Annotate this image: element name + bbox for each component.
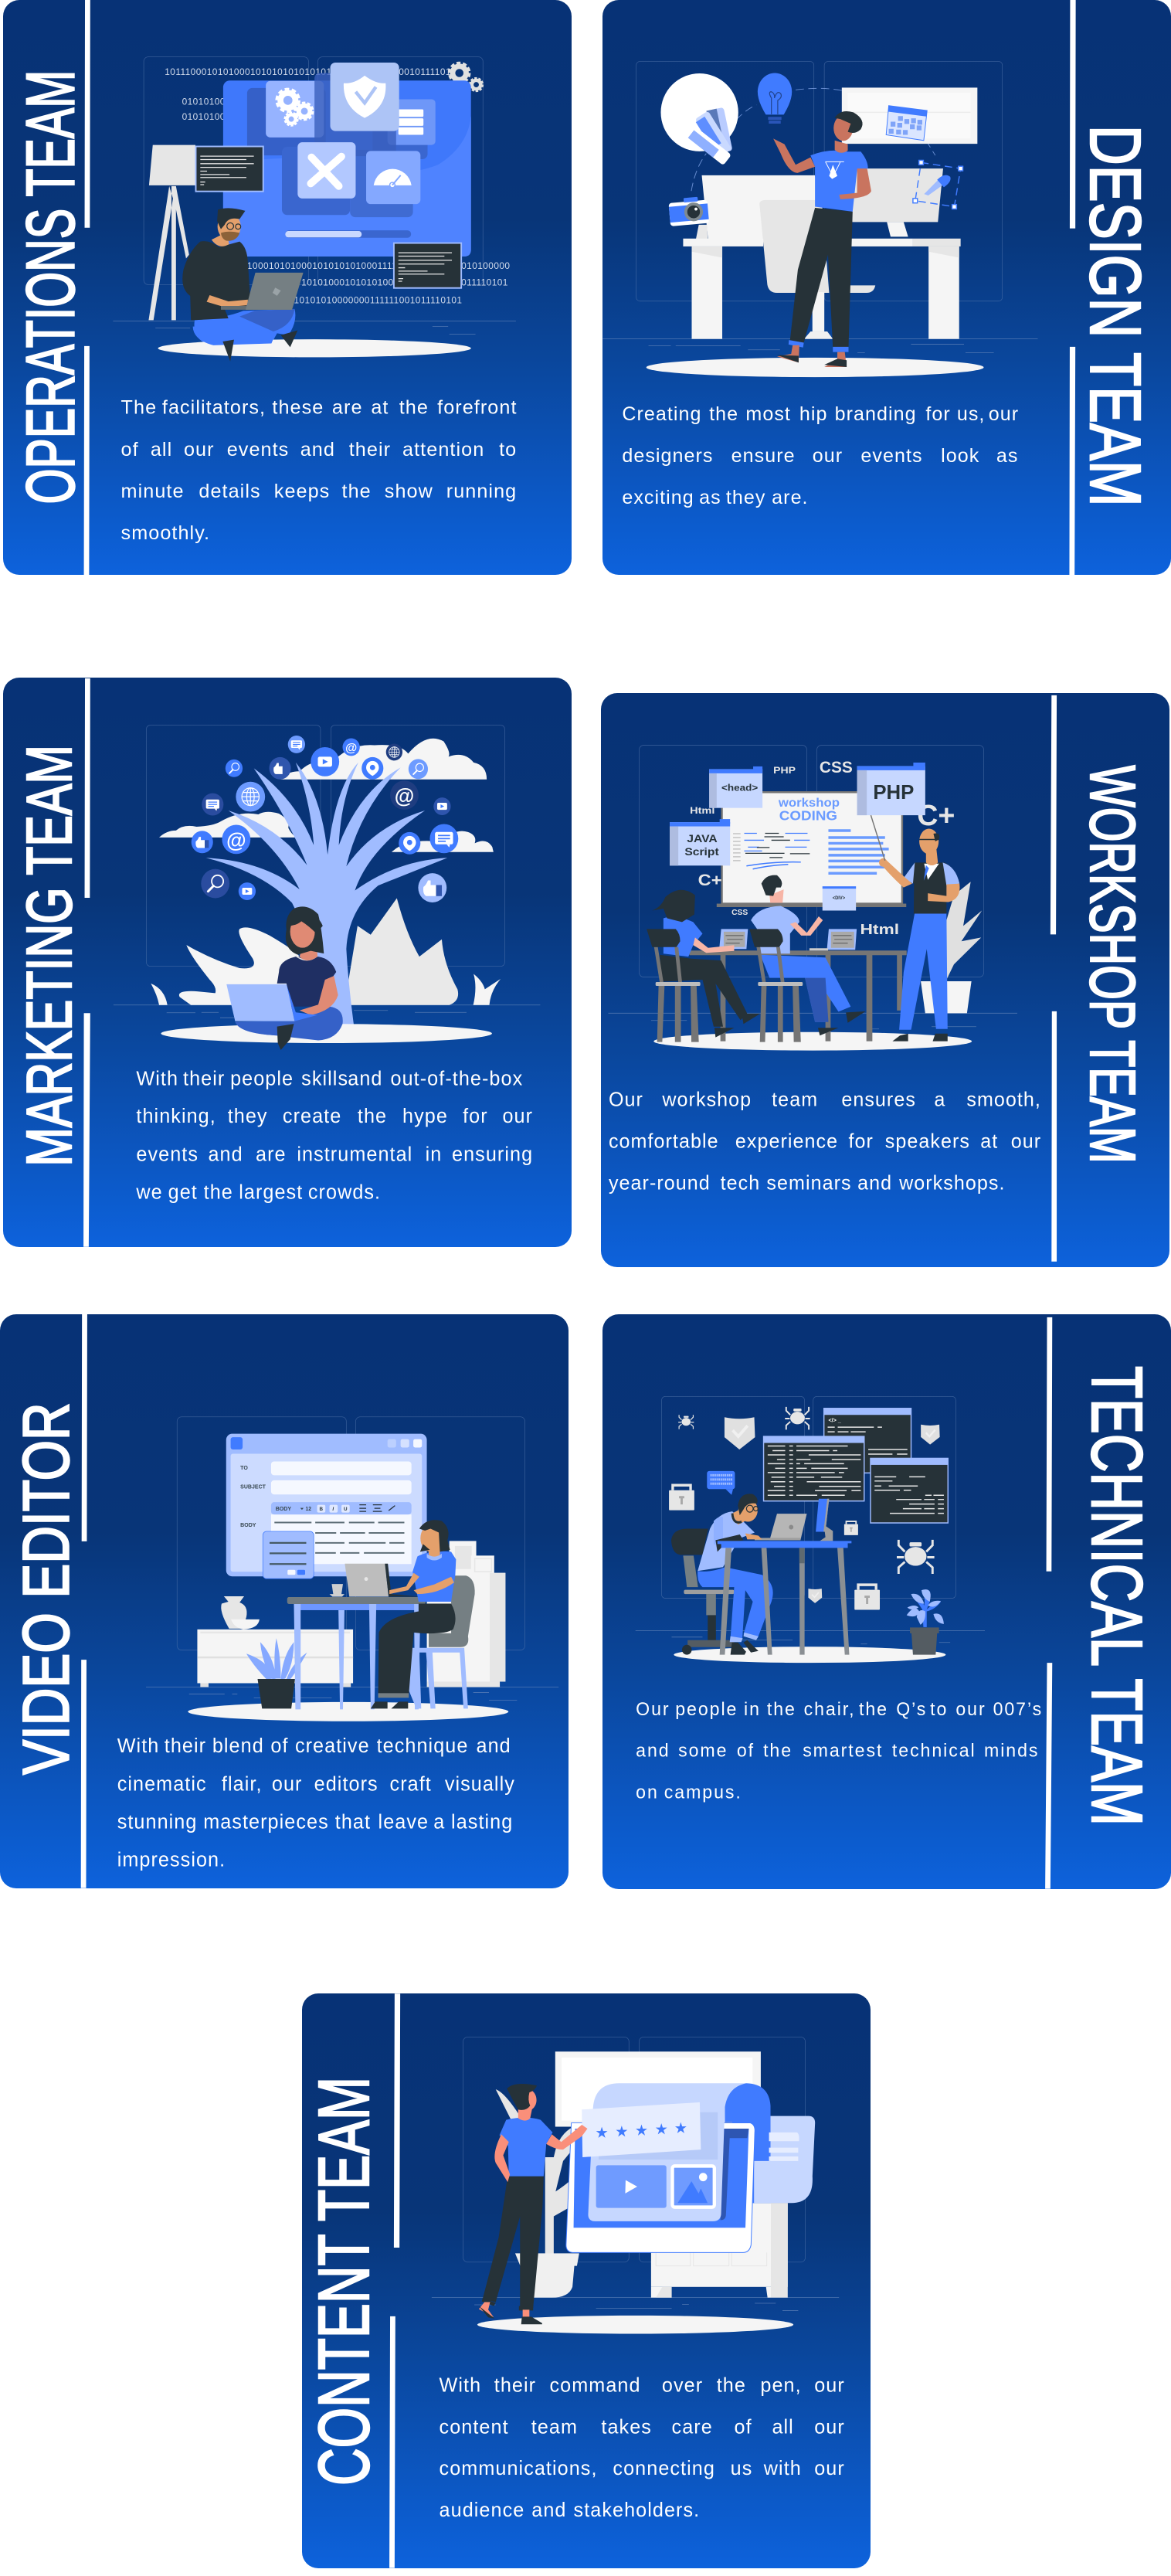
description: leave <box>378 1811 429 1833</box>
toolbar: BODY <box>276 1506 291 1512</box>
monitor and laptop <box>816 1499 829 1531</box>
chair <box>429 1575 475 1647</box>
binary text: 0010111101 <box>399 66 451 77</box>
description: Q’s <box>896 1698 927 1719</box>
window: div <box>823 886 856 910</box>
icon: camera <box>668 196 709 226</box>
binary text: 01010100 <box>182 111 226 122</box>
description: year-round <box>609 1172 711 1195</box>
description: the <box>342 481 372 502</box>
description: Creating <box>622 403 702 425</box>
description: stunning <box>117 1811 197 1833</box>
panel background <box>302 1993 871 2568</box>
description: their <box>165 1735 206 1757</box>
potted plant <box>496 2089 578 2255</box>
illustration: content creator <box>432 2037 839 2334</box>
panel: operations team <box>3 0 572 575</box>
window: div: <DIV> <box>833 896 846 901</box>
wall board <box>842 87 977 144</box>
dialog <box>263 1531 314 1579</box>
clouds <box>281 739 487 780</box>
panel background <box>3 678 572 1247</box>
description: show <box>385 481 433 502</box>
description: blend <box>212 1735 264 1757</box>
wall board <box>555 2051 761 2127</box>
panel: design team <box>602 0 1171 575</box>
description: largest <box>239 1181 303 1204</box>
description: The <box>121 397 157 419</box>
description: of <box>121 439 139 460</box>
description: team <box>531 2416 578 2438</box>
illustration: content creator: ★ <box>675 2121 687 2136</box>
description: us <box>731 2458 752 2479</box>
desk <box>718 1541 851 1548</box>
code label texts: CSS <box>731 909 748 917</box>
description: and <box>636 1740 670 1761</box>
code label texts: PHP <box>773 766 796 776</box>
description: and <box>531 2500 567 2521</box>
description: we <box>135 1181 163 1204</box>
title divider lines <box>81 1314 87 1888</box>
toolbar: 12 <box>306 1507 311 1512</box>
window: javascript: JAVA <box>687 833 718 845</box>
illustration: editor at desk: TO <box>240 1465 248 1471</box>
description: are. <box>772 487 809 508</box>
description: over <box>662 2374 703 2397</box>
description: are <box>332 397 363 419</box>
description: and <box>348 1068 383 1089</box>
code label texts: C+ <box>698 872 722 889</box>
description: and <box>208 1144 243 1165</box>
description: thinking, <box>136 1106 216 1127</box>
illustration: coding workshop <box>608 746 1017 1051</box>
description: smooth, <box>966 1089 1041 1111</box>
background shelves <box>450 1541 477 1575</box>
description: a <box>433 1811 445 1833</box>
description: Our <box>609 1089 643 1111</box>
panel background <box>602 0 1171 575</box>
description: the <box>709 403 738 425</box>
tree <box>206 763 447 1034</box>
description: our <box>955 1698 986 1719</box>
code windows <box>824 1409 911 1473</box>
description: events <box>860 445 923 467</box>
tables and laptops <box>690 950 907 1042</box>
code windows <box>195 147 263 192</box>
description: With <box>117 1735 159 1757</box>
toolbar <box>276 1505 395 1513</box>
description: for <box>849 1130 874 1153</box>
illustration: coding workshop: CODING <box>779 807 837 824</box>
description: events <box>227 439 289 460</box>
description: their <box>183 1068 225 1089</box>
description: audience <box>440 2500 524 2521</box>
description: at <box>371 397 389 419</box>
illustration: editor at desk: SUBJECT <box>240 1484 266 1490</box>
screen back roll <box>725 2083 771 2203</box>
description: details <box>199 481 261 502</box>
description: editors <box>314 1773 378 1795</box>
description: designers <box>622 445 714 467</box>
whiteboard <box>722 792 902 904</box>
code label texts: C+ <box>917 799 955 831</box>
description: to <box>930 1698 948 1719</box>
illustration: designer at desk <box>602 61 1037 377</box>
description: these <box>272 397 324 419</box>
woman with laptop <box>235 1007 343 1041</box>
title divider lines <box>83 678 90 1247</box>
description: flair, <box>222 1773 263 1795</box>
window: php <box>857 763 925 815</box>
description: keeps <box>274 481 330 502</box>
title divider lines <box>1069 0 1076 575</box>
toolbar: U <box>344 1507 348 1512</box>
description: 007’s <box>993 1698 1043 1719</box>
description: cinematic <box>117 1773 207 1795</box>
description: they <box>228 1106 268 1127</box>
description: facilitators, <box>162 397 266 419</box>
description: people <box>230 1068 294 1089</box>
description: ensuring <box>452 1144 533 1165</box>
description: events <box>136 1144 199 1165</box>
floor ellipse <box>647 358 984 377</box>
description: our <box>502 1106 533 1127</box>
description: technical <box>892 1740 976 1761</box>
binary text <box>165 66 510 306</box>
description: their <box>349 439 391 460</box>
window: javascript: Script <box>684 846 719 858</box>
woman at laptop <box>378 1604 456 1694</box>
description: hype <box>402 1106 448 1127</box>
description: our <box>814 2416 845 2438</box>
description: connecting <box>613 2458 715 2479</box>
sideboard with vase <box>197 1630 353 1683</box>
white circle with colour swatches <box>660 73 738 151</box>
description: experience <box>735 1130 838 1153</box>
description: create <box>283 1106 341 1127</box>
description: our <box>1011 1130 1041 1153</box>
icon: calendar <box>886 106 927 141</box>
description: lasting <box>451 1811 513 1833</box>
panel: marketing team <box>3 678 572 1247</box>
description: campus. <box>664 1782 742 1803</box>
window: javascript <box>670 819 730 865</box>
description: their <box>494 2374 536 2397</box>
description: stakeholders. <box>574 2500 700 2521</box>
description: our <box>813 445 843 467</box>
description: with <box>763 2458 802 2479</box>
description: in <box>426 1144 442 1165</box>
description: the <box>358 1106 387 1127</box>
panel background <box>602 1314 1171 1889</box>
description: team <box>772 1089 818 1111</box>
lamp <box>149 145 195 185</box>
description: people <box>675 1698 738 1719</box>
description: skills <box>301 1068 348 1089</box>
icon: lightbulb <box>758 73 792 124</box>
description: takes <box>601 2416 652 2438</box>
description: they <box>726 487 765 508</box>
plant <box>945 882 982 984</box>
description: out-of-the-box <box>391 1068 523 1089</box>
description: and <box>477 1735 511 1757</box>
title divider lines <box>1051 695 1057 1262</box>
description: some <box>678 1740 728 1761</box>
social icons: @ <box>226 828 246 851</box>
binary text: 010100000 <box>461 260 510 271</box>
description: visually <box>445 1773 515 1795</box>
icon: grey gears <box>450 64 482 90</box>
description: the <box>204 1181 233 1204</box>
toolbar: B <box>319 1507 323 1512</box>
description: care <box>672 2416 713 2438</box>
description: Our <box>636 1698 670 1719</box>
panel background <box>601 693 1169 1267</box>
panel: video editor <box>0 1314 569 1888</box>
description: content <box>440 2416 509 2438</box>
description: branding <box>835 403 917 425</box>
chair 1 <box>654 947 701 1042</box>
desktop monitors and desk <box>702 175 823 240</box>
description: smartest <box>803 1740 883 1761</box>
title: workshop team: WORKSHOP TEAM <box>1077 765 1149 1164</box>
panel: workshop team <box>601 693 1169 1267</box>
binary text: 10001010100010101010100011111 <box>247 260 402 271</box>
floor ellipse <box>188 1702 508 1721</box>
description: the <box>859 1698 888 1719</box>
student 1 <box>664 917 702 957</box>
description: command <box>550 2374 641 2397</box>
binary text: 1011100010101000101010101010101011 <box>165 66 348 77</box>
description: for <box>925 403 951 425</box>
description: most <box>745 403 791 425</box>
title: marketing team: MARKETING TEAM <box>13 745 85 1167</box>
description: and <box>300 439 335 460</box>
panel: content team <box>302 1993 871 2568</box>
dashboard panel <box>223 80 471 257</box>
illustration: technician at computer <box>636 1396 985 1663</box>
description: as <box>699 487 721 508</box>
description: our <box>814 2374 845 2397</box>
description: get <box>168 1181 198 1204</box>
email window <box>226 1434 427 1576</box>
student 2 <box>751 906 799 953</box>
description: of <box>734 2416 752 2438</box>
illustration: editor at desk <box>146 1417 558 1721</box>
description: seminars <box>766 1172 852 1195</box>
plant <box>911 1590 941 1627</box>
description: the <box>767 1698 796 1719</box>
illustration: editor at desk: BODY <box>240 1522 256 1528</box>
title: content team: CONTENT TEAM <box>304 2077 384 2486</box>
description: smoothly. <box>121 522 210 544</box>
illustration: marketing tree <box>114 726 540 1050</box>
icon: eyedropper selection <box>915 162 961 207</box>
description: ensures <box>841 1089 916 1111</box>
description: at <box>980 1130 998 1153</box>
illustration: content creator: ★ <box>596 2126 608 2140</box>
social icons <box>192 736 458 902</box>
description: creative <box>295 1735 370 1757</box>
desk <box>287 1597 426 1604</box>
description: our <box>184 439 215 460</box>
window: php: PHP <box>873 782 914 804</box>
description: in <box>744 1698 761 1719</box>
panel background <box>0 1314 569 1888</box>
screen monitor <box>566 2123 755 2252</box>
description: workshop <box>661 1089 752 1111</box>
person with laptop <box>194 309 295 345</box>
speech bubble <box>707 1471 735 1495</box>
toolbar: I <box>332 1507 334 1512</box>
description: crowds. <box>308 1181 381 1204</box>
description: us, <box>957 403 985 425</box>
title divider lines <box>84 0 90 575</box>
description: speakers <box>885 1130 970 1153</box>
illustration: operations person with dashboard <box>113 57 516 362</box>
description: are <box>256 1144 287 1165</box>
code label texts <box>690 759 955 937</box>
panel background <box>3 0 572 575</box>
description: chair, <box>804 1698 856 1719</box>
title divider lines <box>389 1993 400 2568</box>
description: With <box>440 2374 481 2397</box>
presenter <box>899 912 948 1030</box>
description: the <box>763 1740 793 1761</box>
floor ellipse <box>674 1647 945 1663</box>
social icons: @ <box>395 784 414 807</box>
description: minute <box>121 481 185 502</box>
description: running <box>446 481 517 502</box>
cabinet <box>651 2203 788 2287</box>
floor ellipse <box>653 1032 972 1051</box>
description: tech <box>721 1172 760 1195</box>
title: video editor: VIDEO EDITOR <box>10 1402 83 1775</box>
description: of <box>270 1735 289 1757</box>
description: our <box>814 2458 845 2479</box>
icons: bugs, shields, locks <box>669 1407 940 1609</box>
floor ellipse <box>161 1024 492 1043</box>
description: on <box>636 1782 659 1803</box>
description: our <box>989 403 1019 425</box>
crossed legs <box>193 325 297 362</box>
designer figure <box>790 208 853 348</box>
description: hip <box>799 403 827 425</box>
description: communications, <box>440 2458 598 2479</box>
social icons: @ <box>345 742 357 755</box>
technician <box>698 1567 773 1638</box>
illustration: content creator: ★ <box>616 2124 628 2139</box>
illustration: content creator: ★ <box>656 2122 668 2136</box>
illustration: content creator: ★ <box>636 2123 648 2138</box>
overlay card <box>588 2083 746 2221</box>
binary text: 01010100 <box>182 97 226 107</box>
description: for <box>463 1106 488 1127</box>
floor ellipse <box>158 339 471 357</box>
description: attention <box>402 439 484 460</box>
description: comfortable <box>609 1130 719 1153</box>
description: impression. <box>117 1849 226 1871</box>
description: a <box>934 1089 945 1111</box>
description: all <box>151 439 172 460</box>
description: instrumental <box>297 1144 412 1165</box>
description: pen, <box>760 2374 802 2397</box>
description: exciting <box>622 487 694 508</box>
description: forefront <box>437 397 518 419</box>
description: With <box>136 1068 178 1089</box>
panel: technical team <box>602 1314 1171 1889</box>
cup and laptop <box>330 1584 345 1597</box>
description: technique <box>377 1735 468 1757</box>
description: ensure <box>731 445 796 467</box>
binary text: 011110101 <box>461 277 508 287</box>
title: technical team: TECHNICAL TEAM <box>1076 1366 1157 1826</box>
floor ellipse <box>477 2316 793 2334</box>
chair 2 <box>756 947 803 1042</box>
description: craft <box>390 1773 432 1795</box>
bushes <box>179 927 300 1005</box>
description: that <box>335 1811 371 1833</box>
office chair <box>671 1528 708 1555</box>
illustration: coding workshop: workshop <box>778 797 840 810</box>
person <box>483 2177 544 2308</box>
description: all <box>772 2416 794 2438</box>
window: head <box>709 766 762 808</box>
code label texts: Html <box>690 806 714 816</box>
description: our <box>272 1773 302 1795</box>
code windows: </> _ <box>828 1417 842 1424</box>
title: design team: DESIGN TEAM <box>1075 125 1156 507</box>
binary text: 10101010000000111111001011110101 <box>294 295 462 306</box>
description: the <box>717 2374 746 2397</box>
description: workshops. <box>898 1172 1005 1195</box>
description: the <box>399 397 429 419</box>
description: and <box>857 1172 892 1195</box>
description: to <box>499 439 517 460</box>
title divider lines <box>1045 1317 1052 1889</box>
window: head: <head> <box>721 783 758 793</box>
description: of <box>737 1740 755 1761</box>
description: minds <box>984 1740 1039 1761</box>
code label texts: CSS <box>820 759 853 777</box>
potted plant <box>246 1638 307 1680</box>
code label texts: Html <box>860 921 899 937</box>
binary text: 10101000101010100 <box>301 277 394 287</box>
description: as <box>996 445 1019 467</box>
description: look <box>941 445 979 467</box>
description: masterpieces <box>203 1811 329 1833</box>
